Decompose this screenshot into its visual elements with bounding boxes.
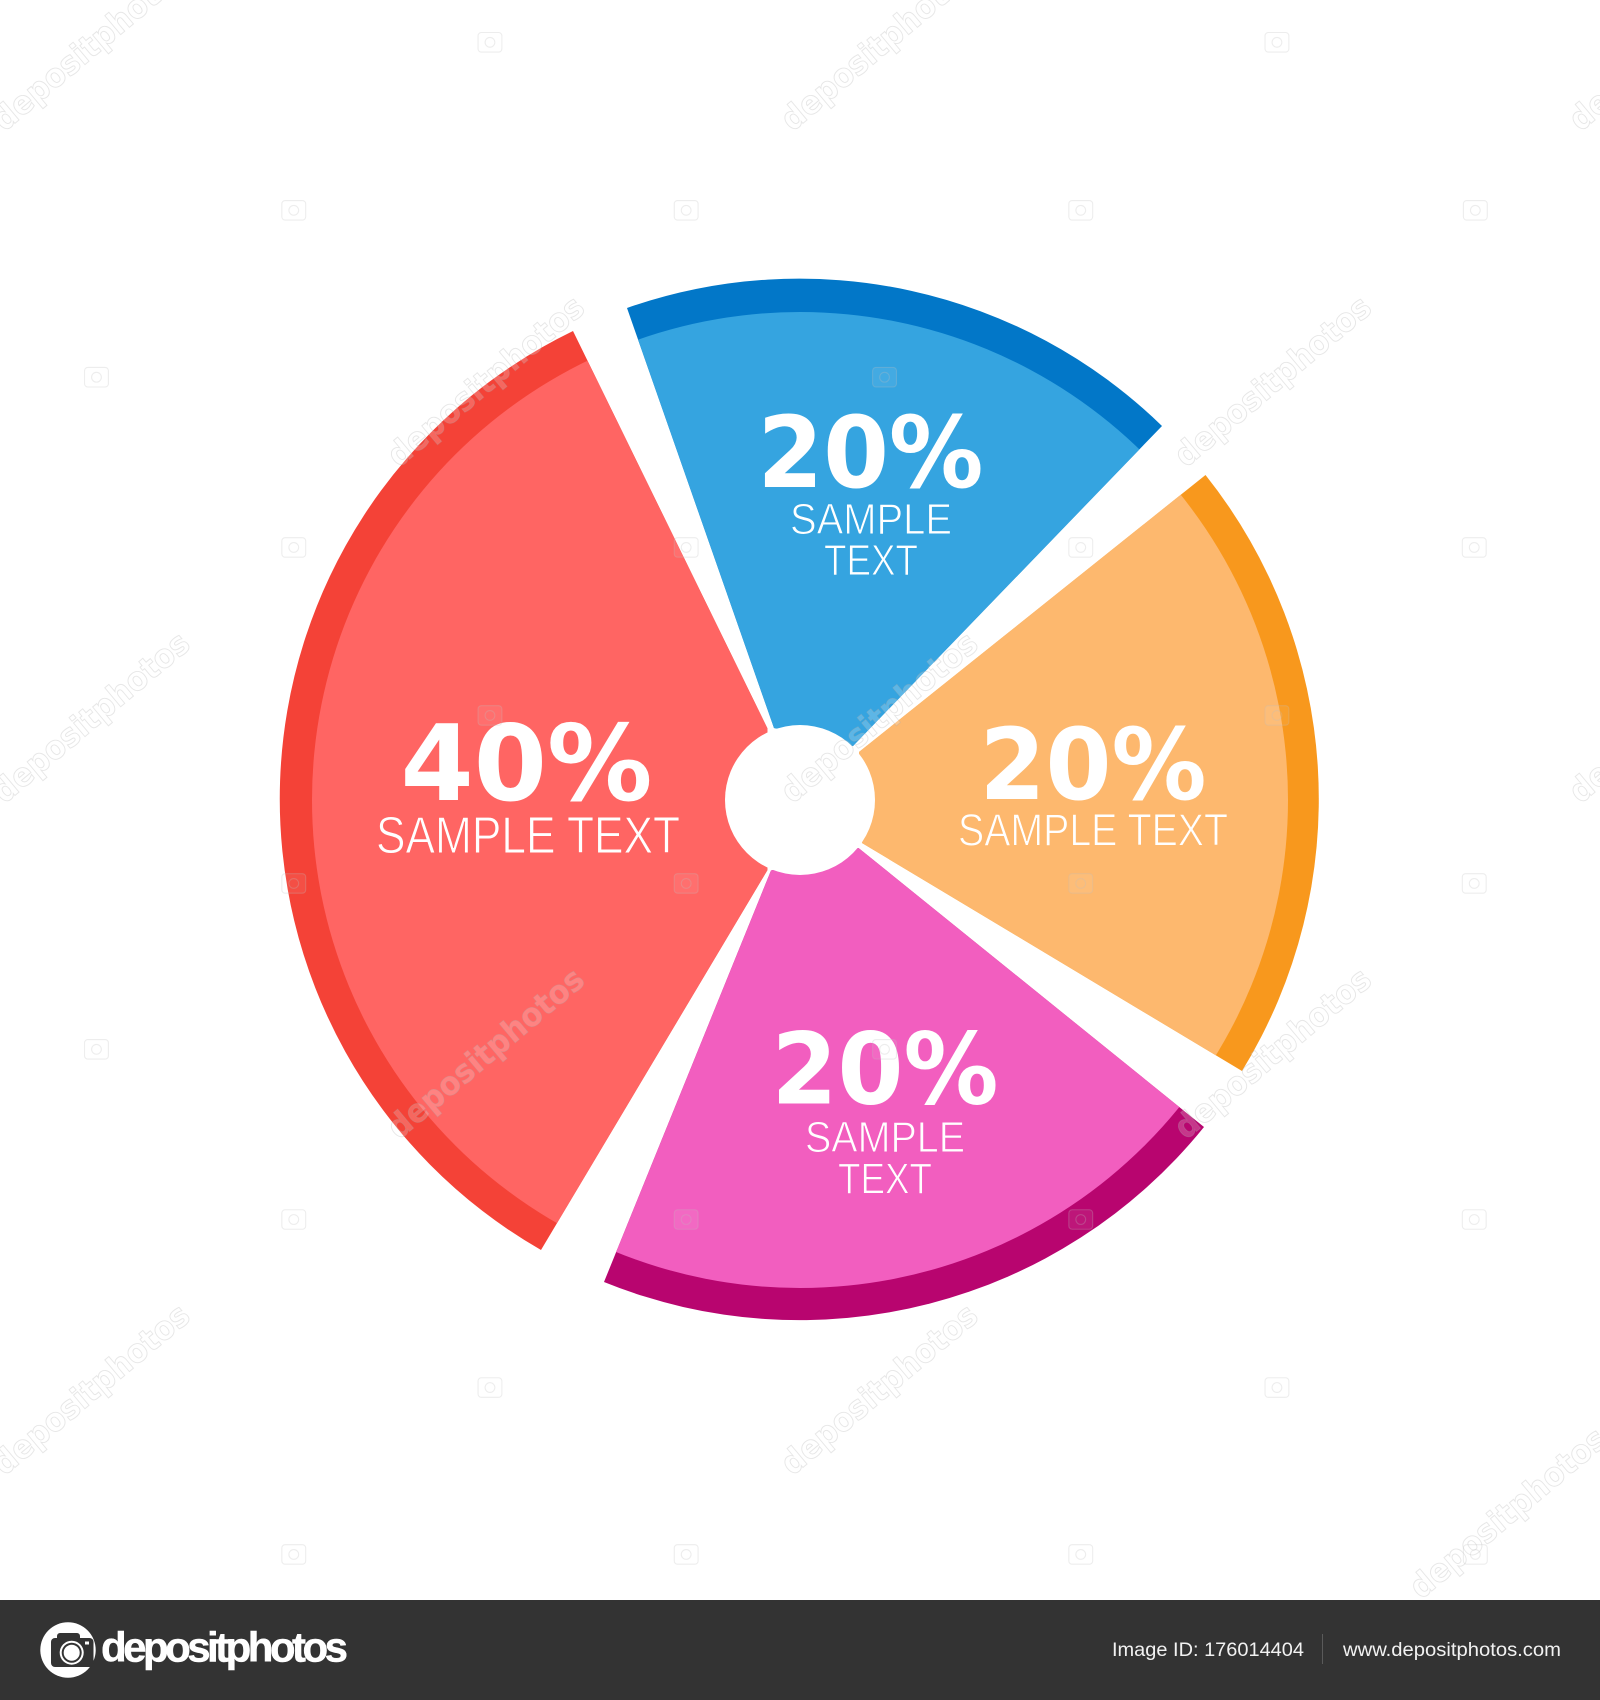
label: pink 20%: TEXT [838, 1154, 932, 1204]
slice: red 40% [280, 331, 768, 1250]
label: orange 20%: 20% [980, 708, 1206, 823]
label: pink 20%: SAMPLE [805, 1113, 965, 1162]
label: pink 20% [772, 1012, 998, 1204]
label: red 40%: SAMPLE TEXT [376, 807, 680, 865]
slice: pink 20% [604, 848, 1204, 1320]
label: orange 20%: SAMPLE TEXT [958, 804, 1228, 856]
label: orange 20% [958, 708, 1228, 856]
watermark overlay: depositphotos [773, 624, 985, 810]
label: red 40% [376, 703, 680, 865]
label: pink 20%: 20% [772, 1012, 998, 1128]
label: blue 20%: 20% [758, 396, 984, 511]
centre hole [725, 725, 875, 875]
watermark overlay: depositphotos [380, 288, 592, 474]
footer bar [0, 1600, 1600, 1700]
label: blue 20%: TEXT [824, 536, 918, 585]
icon: camera logo [40, 1622, 96, 1678]
watermark overlay: depositphotos [773, 1296, 985, 1483]
image id: Image ID: 176014404 [1112, 1639, 1304, 1661]
slice: blue 20% [627, 279, 1162, 746]
website url: www.depositphotos.com [1342, 1639, 1561, 1661]
label: blue 20% [758, 396, 984, 585]
label: blue 20%: SAMPLE [790, 495, 952, 544]
logo wordmark: depositphotos [101, 1624, 348, 1671]
slice: orange 20% [859, 475, 1319, 1071]
label: red 40%: 40% [400, 703, 652, 825]
watermark overlay: depositphotos [1167, 960, 1379, 1146]
watermark overlay: depositphotos [380, 960, 592, 1146]
watermark overlay: depositphotos [1167, 288, 1379, 474]
